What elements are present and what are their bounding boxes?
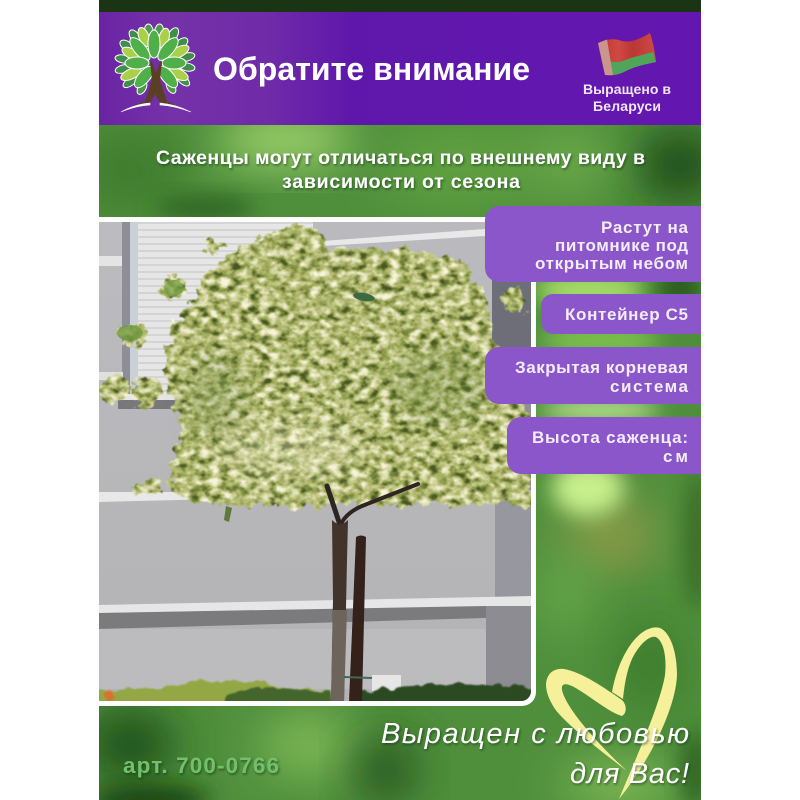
made in Belarus label: Выращено в bbox=[583, 81, 671, 97]
branches bbox=[327, 484, 418, 522]
slogan bbox=[381, 718, 689, 790]
info pill: container: Контейнер С5 bbox=[565, 305, 688, 324]
info pill: nursery: питомнике под bbox=[555, 236, 688, 255]
info pill: nursery: Растут на bbox=[601, 218, 689, 237]
made in Belarus label bbox=[583, 81, 671, 114]
info pill: nursery bbox=[485, 206, 701, 282]
info pill: nursery: открытым небом bbox=[535, 254, 688, 273]
article number: арт. 700-0766 bbox=[123, 753, 279, 778]
photo: tree against building bbox=[95, 222, 535, 706]
subtitle: Саженцы могут отличаться по внешнему виду в bbox=[156, 147, 645, 169]
heading: Обратите внимание bbox=[213, 51, 530, 87]
trunk and stake bbox=[331, 520, 372, 702]
photo frame bbox=[99, 217, 536, 706]
canopy tonal shading bbox=[185, 345, 490, 478]
heart outline bbox=[546, 627, 677, 799]
slogan: Выращен с любовью bbox=[381, 718, 689, 750]
slogan: для Вас! bbox=[570, 758, 689, 790]
info pill: root system: Закрытая корневая bbox=[515, 358, 688, 377]
info pill: container bbox=[541, 294, 701, 334]
header band bbox=[99, 12, 701, 125]
info pill: root system: система bbox=[610, 377, 689, 396]
info pill: height: Высота саженца: bbox=[532, 428, 688, 447]
info pill: height: см bbox=[663, 447, 688, 466]
info pill: height bbox=[507, 417, 701, 474]
made in Belarus label: Беларуси bbox=[593, 98, 661, 114]
canopy foliage bbox=[99, 226, 535, 508]
flag of Belarus bbox=[598, 33, 656, 75]
logo: tree bbox=[114, 23, 196, 112]
info pill: root system bbox=[485, 347, 701, 404]
hedge bbox=[95, 681, 535, 706]
building wall bbox=[99, 222, 531, 702]
subtitle bbox=[156, 147, 645, 193]
subtitle: зависимости от сезона bbox=[282, 171, 520, 193]
